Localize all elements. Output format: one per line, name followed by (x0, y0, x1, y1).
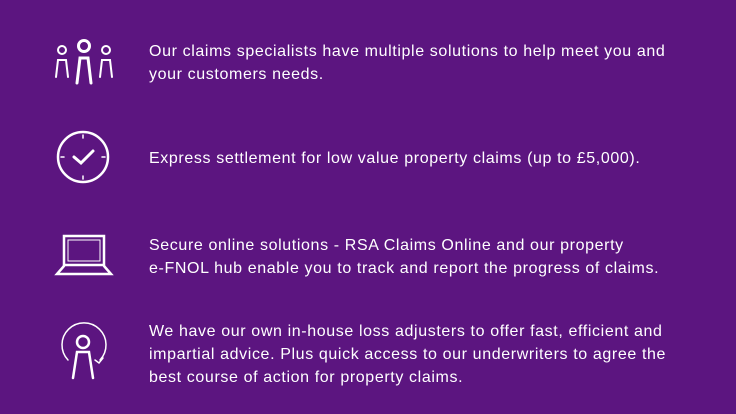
text: specialists: Our claims specialists have multiple solutions to help meet you and (149, 43, 665, 60)
text: online solutions (149, 237, 659, 277)
text: specialists (149, 43, 665, 83)
text: loss adjusters: We have our own in-house loss adjusters to offer fast, efficient and (149, 323, 663, 340)
text: express settlement: Express settlement for low value property claims (up to £5,000). (149, 150, 640, 167)
icon: person rotate (62, 323, 106, 378)
text: loss adjusters: best course of action for property claims. (149, 369, 463, 386)
text: loss adjusters: impartial advice. Plus quick access to our underwriters to agree the (149, 346, 666, 363)
icon: people (56, 40, 112, 83)
icon: laptop (57, 236, 111, 274)
icon: clock (58, 132, 108, 182)
text: online solutions: Secure online solutions - RSA Claims Online and our property (149, 237, 624, 254)
text: specialists: your customers needs. (149, 66, 324, 83)
icons (54, 39, 114, 380)
text: online solutions: e-FNOL hub enable you to track and report the progress of claims. (149, 260, 659, 277)
text: loss adjusters (149, 323, 666, 386)
